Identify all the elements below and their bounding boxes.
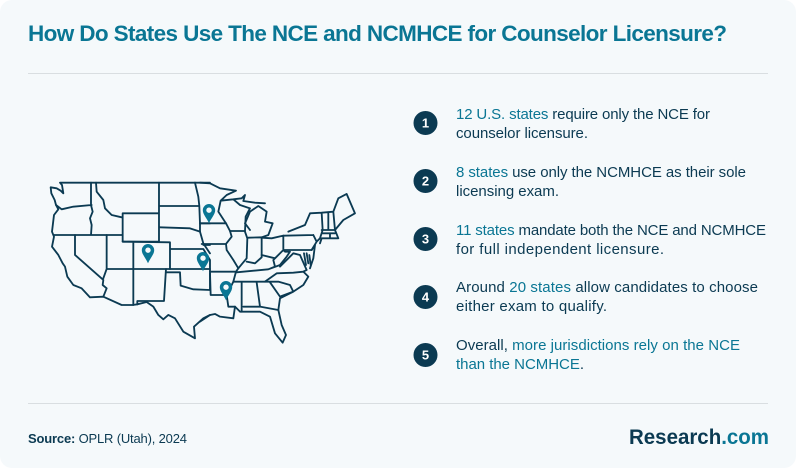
list item 5 [414, 337, 740, 373]
title: How Do States Use The NCE and NCMHCE for Counselor Licensure? [28, 21, 727, 46]
logo: Research.com [629, 426, 769, 449]
list item 4: Around 20 states allow candidates to choose [456, 279, 758, 296]
list item 1: counselor licensure. [456, 125, 588, 142]
list item 4 [414, 279, 758, 315]
map: eastern states [200, 183, 355, 343]
list item 1: 12 U.S. states require only the NCE for [456, 106, 710, 123]
list item 2: 2 [422, 174, 429, 188]
list item 1 [414, 106, 710, 142]
list item 3: for full independent licensure. [456, 241, 664, 258]
list item 4: 4 [422, 290, 430, 304]
list item 2: licensing exam. [456, 183, 559, 200]
source: Source: OPLR (Utah), 2024 [28, 431, 187, 446]
list item 2: 8 states use only the NCMHCE as their sole [456, 164, 746, 181]
list item 5: than the NCMHCE. [456, 356, 584, 373]
map: western states [51, 183, 210, 338]
icon: map pin Kansas [197, 252, 209, 271]
list item 5: Overall, more jurisdictions rely on the NCE [456, 337, 740, 354]
list item 2 [414, 164, 746, 200]
icon: map pin Arkansas [220, 281, 232, 300]
icon: map pin Iowa [203, 204, 215, 223]
list item 3: 3 [422, 232, 429, 246]
icon: map pin Colorado [142, 244, 154, 263]
US map [51, 183, 355, 343]
list item 5: 5 [422, 348, 429, 362]
list item 1: 1 [422, 116, 429, 130]
list item 4: either exam to qualify. [456, 298, 607, 315]
list item 3 [414, 222, 766, 258]
list item 3: 11 states mandate both the NCE and NCMHCE [456, 222, 766, 239]
